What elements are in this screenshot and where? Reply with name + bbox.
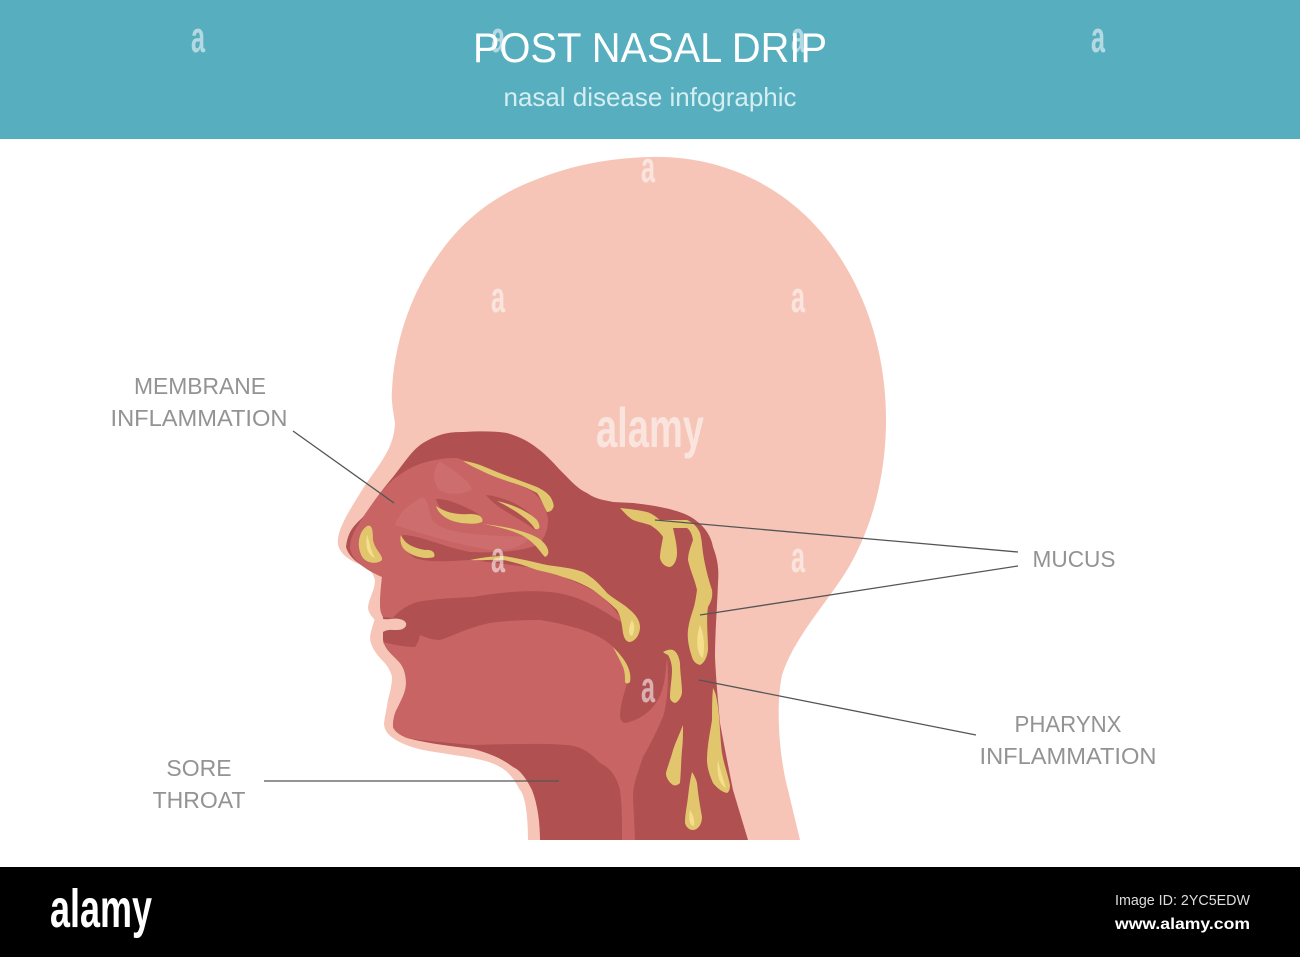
watermark: a: [491, 13, 505, 62]
palate mucus stream: [470, 556, 640, 642]
membrane label: [110, 373, 288, 431]
lip: [372, 618, 406, 632]
bottom drop: [685, 772, 702, 830]
mucus pointer lower: [700, 566, 1018, 615]
footer logo: alamy: [50, 879, 152, 939]
pointer lines: [264, 431, 1018, 781]
mucus highlights: [366, 535, 726, 826]
watermark: a: [791, 533, 805, 582]
subtitle: nasal disease infographic: [504, 82, 796, 112]
mucus drops: [359, 461, 730, 830]
membrane label: INFLAMMATION: [110, 405, 288, 431]
website: www.alamy.com: [1114, 916, 1250, 933]
watermark: a: [641, 663, 655, 712]
membrane label: MEMBRANE: [134, 373, 266, 399]
pharynx label: PHARYNX: [1014, 711, 1122, 737]
pharynx pointer: [699, 680, 976, 735]
footer bar: [0, 867, 1300, 957]
nasal and palate tissue: [350, 458, 623, 623]
sore throat label: SORE: [166, 755, 232, 781]
mucus pointer upper: [655, 520, 1018, 552]
watermark: alamy: [596, 396, 704, 459]
sore throat label: THROAT: [153, 787, 245, 813]
watermark: a: [491, 533, 505, 582]
pharynx label: INFLAMMATION: [980, 743, 1156, 769]
watermark: a: [791, 273, 805, 322]
membrane pointer: [293, 431, 394, 503]
watermark: a: [641, 143, 655, 192]
right long drop: [707, 688, 730, 793]
sore throat label: [153, 755, 245, 813]
watermark: a: [491, 273, 505, 322]
head silhouette: [338, 157, 886, 840]
lower drop: [666, 725, 683, 785]
watermark: [191, 13, 1105, 712]
lighter nasal membrane: [395, 461, 530, 550]
throat top mucus: [620, 508, 712, 665]
tongue and lower jaw: [383, 620, 668, 840]
dark throat and nasal cavity: [346, 431, 748, 840]
nostril mucus: [359, 526, 382, 563]
mid mucus drop: [663, 650, 682, 703]
image id: Image ID: 2YC5EDW: [1115, 892, 1251, 909]
tongue base mucus: [613, 647, 630, 684]
upper turbinate mucus: [463, 461, 554, 512]
middle mucus streaks: [400, 501, 548, 558]
pharynx label: [980, 711, 1156, 769]
watermark: a: [191, 13, 205, 62]
title: POST NASAL DRIP: [473, 24, 827, 71]
nasal cavity dark slits: [401, 495, 545, 561]
watermark: a: [1091, 13, 1105, 62]
mucus label: MUCUS: [1032, 546, 1116, 572]
sore throat pointer: [264, 780, 559, 782]
header band: [0, 0, 1300, 139]
watermark: a: [791, 13, 805, 62]
